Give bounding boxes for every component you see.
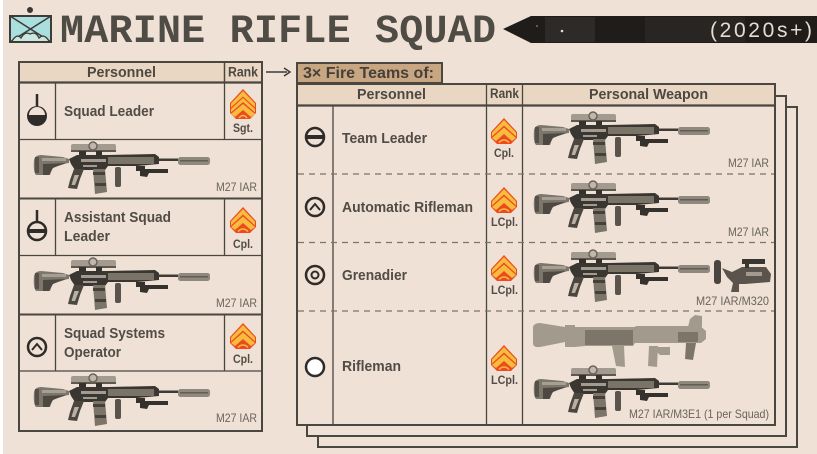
table header: Rank <box>228 64 258 80</box>
table header: Rank <box>490 86 519 101</box>
row: rifleman: Rifleman <box>342 358 401 375</box>
icon: M3E1 recoilless rifle <box>533 315 706 367</box>
row: assistant squad leader <box>28 207 257 310</box>
row: squad systems operator: Squad Systems <box>64 325 165 342</box>
row: squad systems operator: Operator <box>64 344 121 361</box>
icon: assistant squad leader symbol <box>28 210 46 240</box>
icon: automatic rifleman symbol <box>306 198 324 216</box>
row: grenadier: Grenadier <box>342 267 407 284</box>
tab: fire teams heading: 3× Fire Teams of: <box>303 65 434 82</box>
icon: rifleman symbol <box>306 358 324 376</box>
title: MARINE RIFLE SQUAD <box>60 10 496 55</box>
icon: grenadier symbol <box>306 266 324 284</box>
rank insignia <box>230 89 256 119</box>
row: squad systems operator <box>28 323 257 426</box>
row: team leader: Cpl. <box>494 148 514 160</box>
table header: Personal Weapon <box>589 86 708 103</box>
table header: Personnel <box>357 86 426 103</box>
row: automatic rifleman: LCpl. <box>491 217 518 229</box>
table header <box>297 84 775 106</box>
row: automatic rifleman: M27 IAR <box>728 225 769 239</box>
panel: fire team table <box>297 63 775 425</box>
row: squad systems operator: M27 IAR <box>216 411 257 425</box>
row: squad leader: M27 IAR <box>216 180 257 194</box>
icon: M320 grenade launcher <box>714 259 771 292</box>
date banner: (2020s+) <box>710 19 812 42</box>
row: team leader <box>306 112 769 170</box>
weapon <box>34 142 210 194</box>
row: team leader: M27 IAR <box>728 156 769 170</box>
icon: squad systems operator symbol <box>28 338 46 356</box>
icon: squad map symbol <box>10 7 51 42</box>
row: rifleman: M27 IAR/M3E1 (1 per Squad) <box>629 407 769 421</box>
row: rifleman: LCpl. <box>491 375 518 387</box>
row: assistant squad leader: Leader <box>64 228 110 245</box>
row: squad systems operator: Cpl. <box>233 354 253 366</box>
row: squad leader: Squad Leader <box>64 103 154 120</box>
icon: team leader symbol <box>306 128 324 146</box>
row: team leader: Team Leader <box>342 130 427 147</box>
row: grenadier: M27 IAR/M320 <box>696 294 769 308</box>
row: squad leader <box>27 89 257 194</box>
table header: Personnel <box>87 64 156 81</box>
row: squad leader: Sgt. <box>233 123 253 135</box>
row: automatic rifleman <box>306 181 769 239</box>
icon: squad leader symbol <box>27 94 47 126</box>
date banner <box>503 16 817 43</box>
row: rifleman <box>306 315 769 421</box>
row: grenadier: LCpl. <box>491 285 518 297</box>
panel: squad headquarters table <box>19 62 262 431</box>
row: assistant squad leader: Cpl. <box>233 239 253 251</box>
row: automatic rifleman: Automatic Rifleman <box>342 199 473 216</box>
stacked sheets behind table <box>307 96 797 447</box>
row: assistant squad leader: M27 IAR <box>216 296 257 310</box>
row: assistant squad leader: Assistant Squad <box>64 209 171 226</box>
arrow <box>266 68 290 76</box>
row: grenadier <box>306 250 771 308</box>
table header <box>19 62 262 82</box>
